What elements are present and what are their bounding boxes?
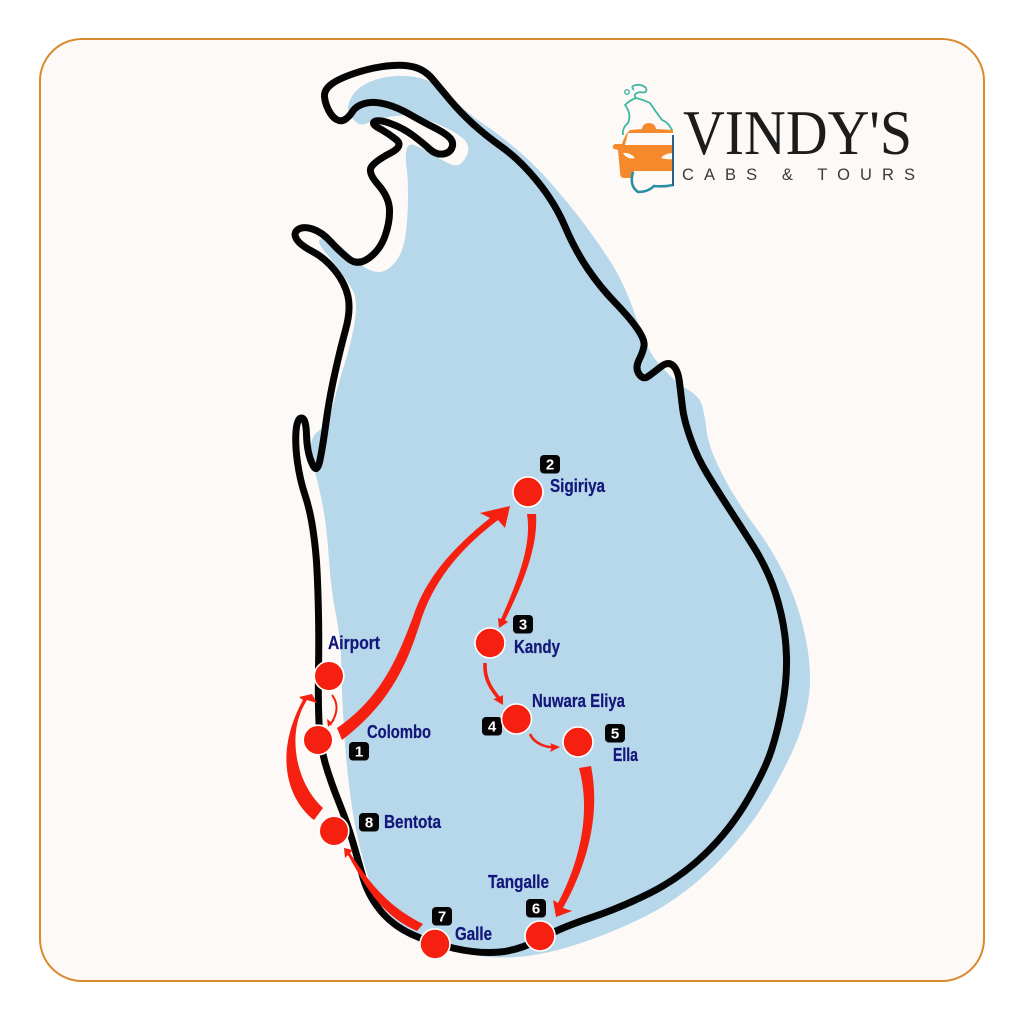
stop 3: Kandy xyxy=(475,615,560,658)
arrow: Airport to Colombo xyxy=(327,695,337,727)
stop 7: Galle: 7 xyxy=(438,908,446,926)
stop 6: Tangalle: 6 xyxy=(532,900,540,918)
stop 4: Nuwara Eliya: 4 xyxy=(488,718,497,736)
stop 6: Tangalle xyxy=(488,872,555,951)
arrow: Colombo to Sigiriya xyxy=(337,506,510,740)
map: Sri Lanka blue land fill xyxy=(311,76,810,958)
stop 1: Colombo xyxy=(303,722,431,760)
stop 2: Sigiriya: 2 xyxy=(546,456,554,474)
logo: Vindy's Cabs & Tours xyxy=(613,85,915,192)
stop 7: Galle: Galle xyxy=(455,924,492,944)
stop 5: Ella xyxy=(563,724,639,765)
stop 1: Colombo: 1 xyxy=(355,744,363,760)
stop 8: Bentota: Bentota xyxy=(384,812,442,832)
stop: Airport xyxy=(314,633,380,691)
arrow: Sigiriya to Kandy xyxy=(498,514,536,628)
stop 3: Kandy: 3 xyxy=(519,616,527,634)
stop: Airport: Airport xyxy=(328,633,380,653)
arrow: Nuwara Eliya to Ella xyxy=(530,734,560,752)
stop 1: Colombo: Colombo xyxy=(367,722,431,742)
stop 4: Nuwara Eliya: Nuwara Eliya xyxy=(532,691,626,711)
logo wordmark: VINDY'S xyxy=(683,97,912,168)
map: black island outline xyxy=(295,65,787,953)
stop 7: Galle xyxy=(420,907,492,959)
stop 5: Ella: 5 xyxy=(611,726,619,742)
stop 2: Sigiriya: Sigiriya xyxy=(550,476,606,496)
logo tagline: CABS & TOURS xyxy=(682,166,915,184)
stop 3: Kandy: Kandy xyxy=(514,637,560,657)
stop 8: Bentota: 8 xyxy=(365,814,373,832)
arrow: Kandy to Nuwara Eliya xyxy=(485,663,503,705)
arrow: Bentota to Airport xyxy=(286,694,323,820)
stop 5: Ella: Ella xyxy=(613,745,639,765)
arrow: Galle to Bentota xyxy=(344,848,423,931)
stop 8: Bentota xyxy=(319,812,442,846)
stop 6: Tangalle: Tangalle xyxy=(488,872,549,892)
stop 2: Sigiriya xyxy=(513,455,606,507)
stop 4: Nuwara Eliya xyxy=(482,691,626,736)
arrow: Ella to Tangalle xyxy=(553,766,594,917)
logo icon: island and taxi xyxy=(613,85,673,192)
